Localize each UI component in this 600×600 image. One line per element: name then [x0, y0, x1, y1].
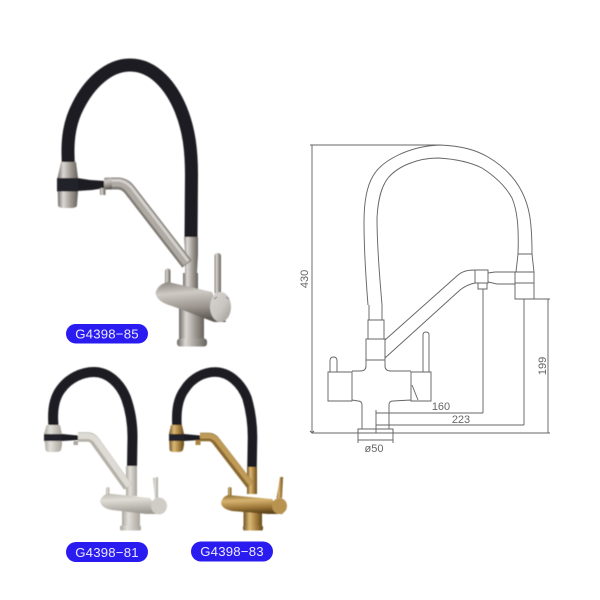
technical dimension drawing: [299, 145, 550, 455]
drawing: faucet body: [328, 320, 431, 433]
main body: [100, 494, 162, 514]
right lever: [153, 477, 158, 500]
base foot: [243, 526, 263, 530]
faucet photo: G4398-85 brushed steel: [57, 65, 231, 346]
dimension: 223 reach: [376, 299, 524, 426]
drawing: spout arm: [385, 270, 475, 358]
spray head black band: [44, 434, 62, 441]
dimension: base diameter 50: [358, 429, 393, 455]
base pillar: [179, 305, 204, 340]
body end cap: [210, 292, 231, 322]
right lever: [276, 477, 283, 498]
dimension: base diameter 50: ø50: [365, 443, 383, 455]
body end cap: [272, 498, 287, 514]
model label: G4398-83: [191, 542, 273, 562]
upright column: [247, 467, 257, 494]
drawing: hose outline: [364, 145, 532, 320]
base pillar: [244, 508, 262, 528]
dimension: 199 height: [533, 299, 550, 433]
spray head: [58, 162, 78, 208]
upright column: [183, 237, 198, 290]
black side hose: [184, 434, 200, 441]
spray head: [169, 425, 184, 452]
left small lever: [106, 487, 110, 498]
spout valve: [74, 441, 78, 445]
faucet photo: G4398-83 brushed gold: [169, 372, 287, 530]
cap red and blue marks: [214, 297, 229, 299]
spout arm: [78, 436, 129, 487]
dimension: 223 reach: 223: [452, 414, 470, 426]
spout elbow joint: [104, 178, 112, 190]
dimension: 199 height: 199: [537, 357, 549, 375]
base foot: [120, 526, 141, 530]
black flexible hose: [177, 372, 252, 468]
model label: G4398-81: G4398−81: [75, 545, 139, 560]
left small lever: [228, 487, 232, 498]
upright column: [126, 466, 137, 496]
faucet photo: G4398-81 white granite: [44, 372, 167, 530]
spray head: [44, 425, 62, 452]
spout valve: [196, 440, 200, 445]
model label: G4398-85: G4398−85: [75, 326, 139, 342]
right lever: [214, 253, 221, 295]
dimension: overall height 430: [299, 145, 550, 433]
black flexible hose: [53, 372, 132, 468]
base pillar: [122, 508, 140, 528]
main body: [156, 282, 226, 322]
body end cap: [151, 498, 167, 514]
left small lever: [165, 268, 170, 286]
base foot: [177, 338, 207, 346]
spout arm: [200, 436, 251, 485]
spout arm: [105, 180, 188, 264]
black flexible hose: [68, 65, 192, 240]
dimension: overall height 430: 430: [299, 270, 311, 288]
drawing: spray head and side hose: [475, 254, 534, 299]
model label: G4398-83: G4398−83: [200, 544, 264, 559]
dimension: 160 reach: 160: [432, 401, 450, 413]
spray head black band: [57, 178, 78, 192]
spray head black band: [169, 434, 184, 441]
model label: G4398-85: [66, 324, 148, 344]
dimension: 160 reach: [376, 289, 483, 433]
black side hose: [62, 434, 78, 441]
main body: [221, 495, 283, 514]
spout small valve: [100, 188, 106, 195]
model label: G4398-81: [66, 542, 148, 562]
black side hose: [77, 178, 105, 191]
